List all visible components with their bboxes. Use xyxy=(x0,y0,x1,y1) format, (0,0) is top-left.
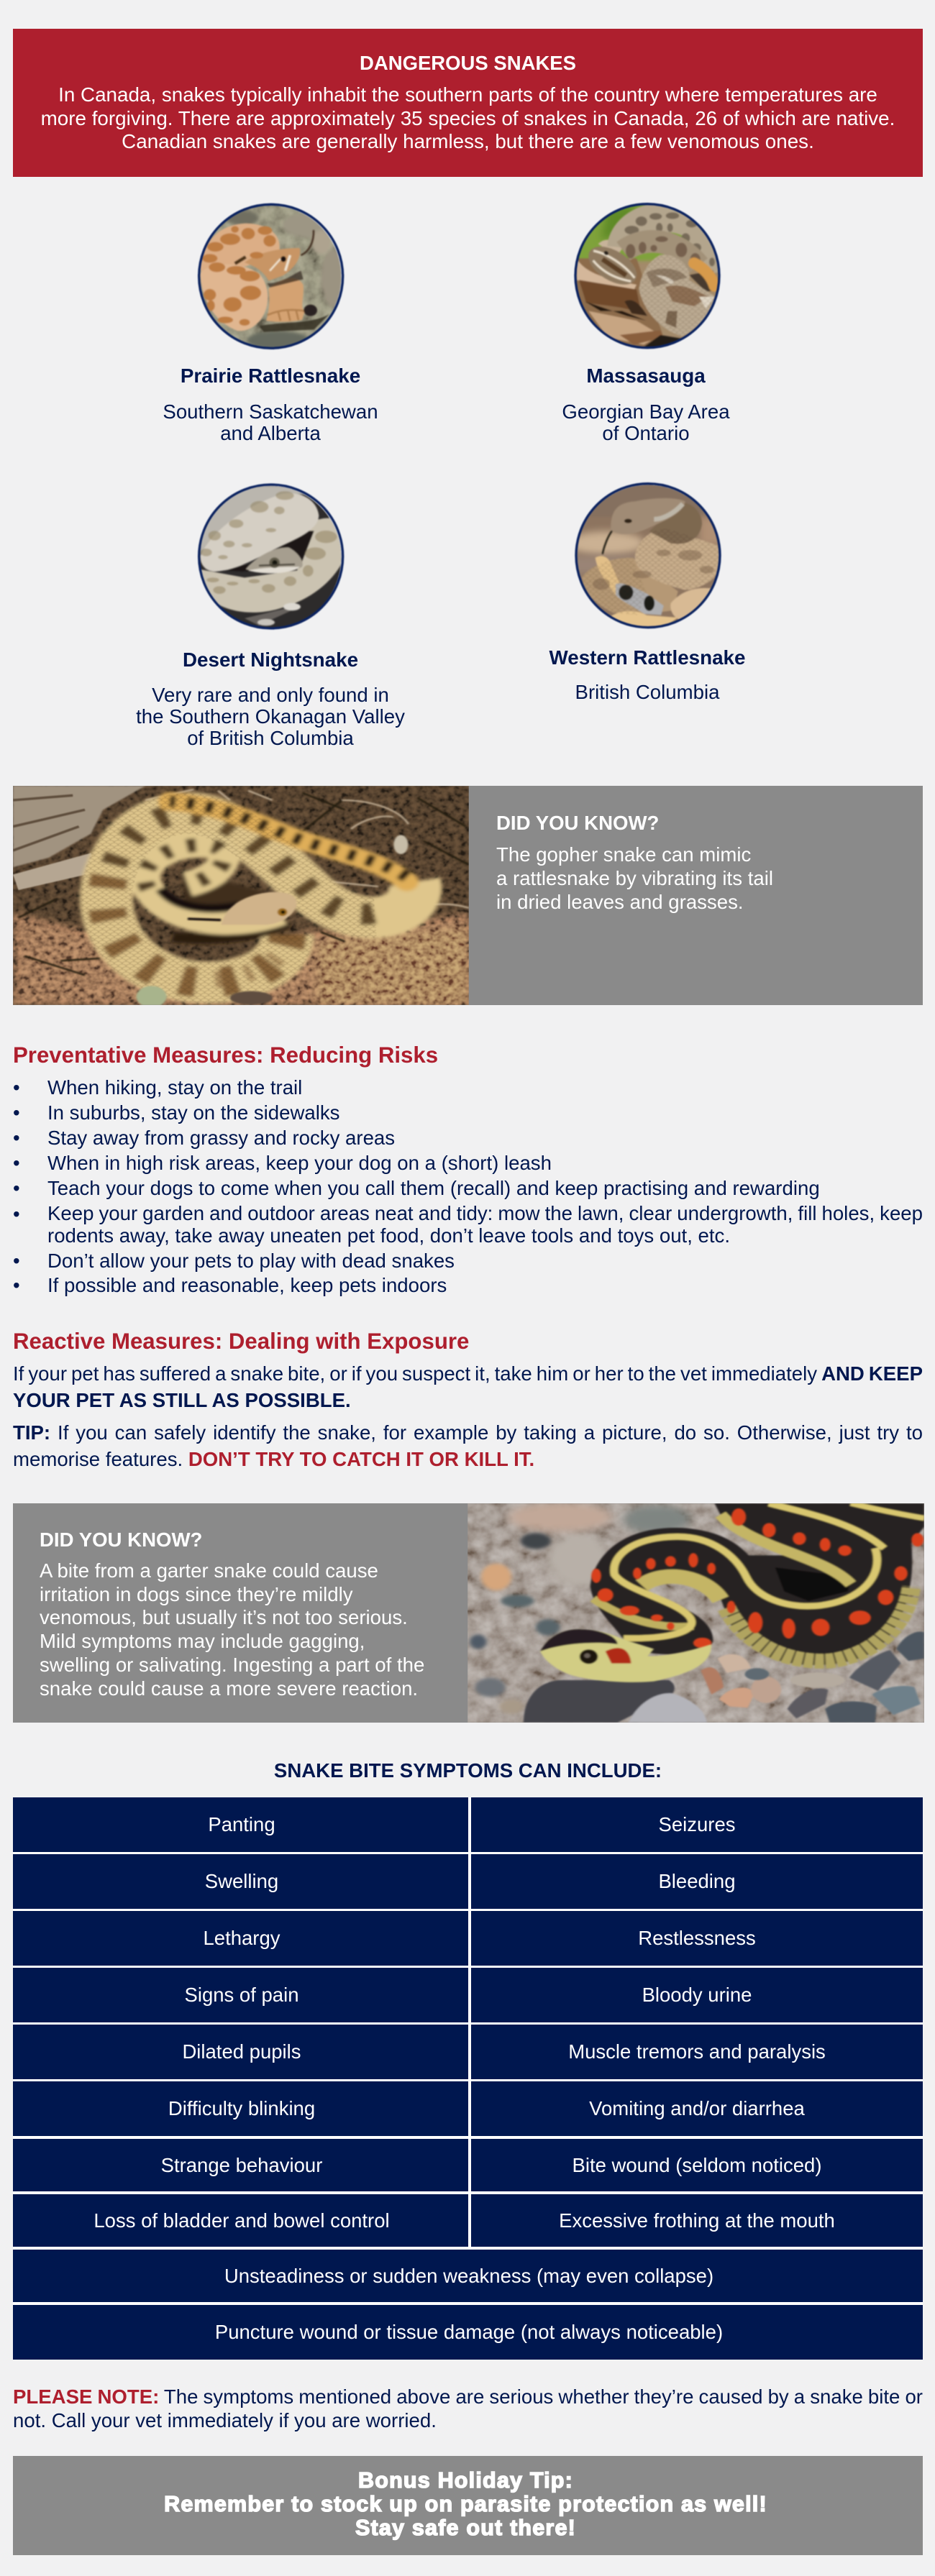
cell xyxy=(13,2305,923,2360)
heading: DID YOU KNOW? xyxy=(496,812,659,834)
cell: Strange behaviour xyxy=(161,2154,322,2176)
cell: Swelling xyxy=(205,1870,278,1892)
bullet 4 xyxy=(13,1152,552,1174)
banner: bonus holiday tip: Stay safe out there! xyxy=(355,2516,576,2540)
cell: Seizures xyxy=(659,1813,735,1835)
panel: did you know gopher snake xyxy=(13,786,923,1005)
range: Desert Nightsnake: of British Columbia xyxy=(187,727,354,749)
cell xyxy=(471,2194,923,2247)
body text: venomous, but usually it’s not too serious. xyxy=(40,1606,408,1628)
intro text: more forgiving. There are approximately 35 species of snakes in Canada, 26 of which are native. xyxy=(41,107,895,129)
snake photo: Desert Nightsnake xyxy=(197,482,345,631)
list: preventative measures: Teach your dogs to come when you call them (recall) and keep practising and rewarding xyxy=(47,1177,820,1199)
cell xyxy=(13,2025,468,2079)
range: Prairie Rattlesnake xyxy=(163,400,378,444)
cell xyxy=(471,2081,923,2136)
snake photo: Prairie Rattlesnake xyxy=(197,203,345,351)
list: preventative measures: • xyxy=(13,1274,20,1296)
photo: garter snake xyxy=(468,1503,924,1723)
range: Massasauga: of Ontario xyxy=(602,422,690,444)
cell: Muscle tremors and paralysis xyxy=(568,2040,826,2063)
list: preventative measures: If possible and reasonable, keep pets indoors xyxy=(47,1274,447,1296)
cell: Loss of bladder and bowel control xyxy=(94,2209,390,2232)
note xyxy=(13,2385,923,2431)
cell xyxy=(13,1797,468,1852)
paragraph: tip: TIP: If you can safely identify the snake, for example by taking a picture, do so. Otherwise, just try to xyxy=(13,1421,923,1444)
snake photo: Western Rattlesnake xyxy=(574,482,722,630)
cell: Dilated pupils xyxy=(182,2040,301,2063)
cell xyxy=(471,1968,923,2022)
cell: Puncture wound or tissue damage (not always noticeable) xyxy=(215,2321,723,2343)
body text: irritation in dogs since they’re mildly xyxy=(40,1583,353,1605)
cell: Unsteadiness or sudden weakness (may even collapse) xyxy=(224,2265,713,2286)
cell xyxy=(13,2081,468,2136)
paragraph: exposure: YOUR PET AS STILL AS POSSIBLE. xyxy=(13,1389,351,1411)
label: Desert Nightsnake: Desert Nightsnake xyxy=(183,648,358,671)
bullet 6: • xyxy=(13,1203,20,1225)
range: Massasauga: Georgian Bay Area xyxy=(562,400,730,423)
cell xyxy=(13,1968,468,2022)
bullet 1 xyxy=(13,1076,302,1099)
cell xyxy=(471,2025,923,2079)
intro text: In Canada, snakes typically inhabit the southern parts of the country where temperatures are xyxy=(58,83,877,106)
paragraph: tip: memorise features. DON’T TRY TO CATCH IT OR KILL IT. xyxy=(13,1448,534,1470)
cell: Lethargy xyxy=(203,1927,280,1949)
paragraph: tip xyxy=(13,1421,923,1470)
cell: Difficulty blinking xyxy=(168,2097,315,2119)
label: Prairie Rattlesnake: Prairie Rattlesnake xyxy=(181,365,360,387)
bullet 7 xyxy=(13,1250,455,1272)
cell xyxy=(13,1911,468,1966)
cell: Excessive frothing at the mouth xyxy=(559,2209,835,2232)
note: not. Call your vet immediately if you are worried. xyxy=(13,2409,437,2431)
list: preventative measures: When hiking, stay on the trail xyxy=(47,1076,302,1099)
cell xyxy=(471,1911,923,1966)
note: PLEASE NOTE: The symptoms mentioned above are serious whether they’re caused by a snake bite or xyxy=(13,2385,923,2408)
list: preventative measures: When in high risk areas, keep your dog on a (short) leash xyxy=(47,1152,552,1174)
body text: in dried leaves and grasses. xyxy=(496,891,744,913)
table: symptoms xyxy=(13,1797,923,2360)
heading: DID YOU KNOW? xyxy=(40,1528,202,1551)
title: DANGEROUS SNAKES xyxy=(360,52,576,74)
banner: bonus holiday tip: Remember to stock up on parasite protection as well! xyxy=(164,2492,767,2516)
ring xyxy=(576,484,720,628)
body text: Mild symptoms may include gagging, xyxy=(40,1630,365,1652)
intro text: Canadian snakes are generally harmless, but there are a few venomous ones. xyxy=(122,130,814,152)
cell: Restlessness xyxy=(638,1927,756,1949)
bullet 6: Keep your garden and outdoor areas neat and tidy: mow the lawn, clear undergrowth, fill holes, keep xyxy=(47,1202,923,1224)
heading: symptoms: SNAKE BITE SYMPTOMS CAN INCLUDE: xyxy=(274,1759,662,1782)
paragraph: exposure: If your pet has suffered a snake bite, or if you suspect it, take him or her to the vet immediately AND KEEP xyxy=(13,1362,923,1385)
cell: Signs of pain xyxy=(184,1984,299,2006)
list: preventative measures: In suburbs, stay on the sidewalks xyxy=(47,1101,339,1124)
body text xyxy=(496,843,773,913)
ring xyxy=(199,485,343,628)
range: Western Rattlesnake: British Columbia xyxy=(575,681,719,703)
label: Massasauga: Massasauga xyxy=(586,365,706,387)
banner: bonus holiday tip: Bonus Holiday Tip: xyxy=(358,2468,573,2493)
body text: A bite from a garter snake could cause xyxy=(40,1559,378,1582)
paragraph: exposure xyxy=(13,1362,923,1411)
photo: gopher snake xyxy=(13,786,469,1005)
cell xyxy=(471,1797,923,1852)
cell: Vomiting and/or diarrhea xyxy=(589,2097,805,2119)
list: preventative measures xyxy=(13,1076,923,1296)
cell xyxy=(471,2139,923,2191)
cell xyxy=(13,2139,468,2191)
list: preventative measures: • xyxy=(13,1101,20,1124)
body text: swelling or salivating. Ingesting a part of the xyxy=(40,1654,424,1676)
list: preventative measures: Don’t allow your pets to play with dead snakes xyxy=(47,1250,455,1272)
list: preventative measures: • xyxy=(13,1127,20,1149)
range: Desert Nightsnake xyxy=(136,684,405,749)
banner: bonus holiday tip xyxy=(13,2456,923,2555)
heading: reactive measures: Reactive Measures: Dealing with Exposure xyxy=(13,1329,469,1354)
body text: The gopher snake can mimic xyxy=(496,843,751,866)
label: Western Rattlesnake: Western Rattlesnake xyxy=(549,646,745,669)
bullet 3 xyxy=(13,1127,395,1149)
bullet 6: rodents away, take away uneaten pet food, don’t leave tools and toys out, etc. xyxy=(47,1224,730,1247)
cell xyxy=(471,1854,923,1909)
intro text xyxy=(41,83,895,152)
heading: preventative measures: Preventative Measures: Reducing Risks xyxy=(13,1042,438,1068)
body text xyxy=(40,1559,424,1700)
body text: snake could cause a more severe reaction. xyxy=(40,1677,418,1700)
range: Prairie Rattlesnake: Southern Saskatchewan xyxy=(163,400,378,423)
panel: did you know garter snake xyxy=(13,1503,924,1723)
cell: Bleeding xyxy=(658,1870,736,1892)
header banner xyxy=(13,29,923,177)
range: Prairie Rattlesnake: and Alberta xyxy=(220,422,321,444)
cell xyxy=(13,2194,468,2247)
list: preventative measures: • xyxy=(13,1076,20,1099)
range: Desert Nightsnake: the Southern Okanagan Valley xyxy=(136,705,405,728)
body text: a rattlesnake by vibrating its tail xyxy=(496,867,773,889)
ring xyxy=(199,204,343,348)
range: Desert Nightsnake: Very rare and only found in xyxy=(152,684,389,706)
list: preventative measures: • xyxy=(13,1177,20,1199)
range: Massasauga xyxy=(562,400,730,444)
cell xyxy=(13,1854,468,1909)
bullet 6 xyxy=(13,1202,923,1247)
list: preventative measures: Stay away from grassy and rocky areas xyxy=(47,1127,395,1149)
cell xyxy=(13,2250,923,2302)
list: preventative measures: • xyxy=(13,1152,20,1174)
bullet 8 xyxy=(13,1274,447,1296)
bullet 5 xyxy=(13,1177,820,1199)
cell: Panting xyxy=(208,1813,275,1835)
snake photo: Massasauga xyxy=(573,201,721,349)
bullet 2 xyxy=(13,1101,339,1124)
ring xyxy=(575,204,719,348)
list: preventative measures: • xyxy=(13,1250,20,1272)
cell: Bite wound (seldom noticed) xyxy=(573,2154,821,2176)
cell: Bloody urine xyxy=(642,1984,752,2006)
